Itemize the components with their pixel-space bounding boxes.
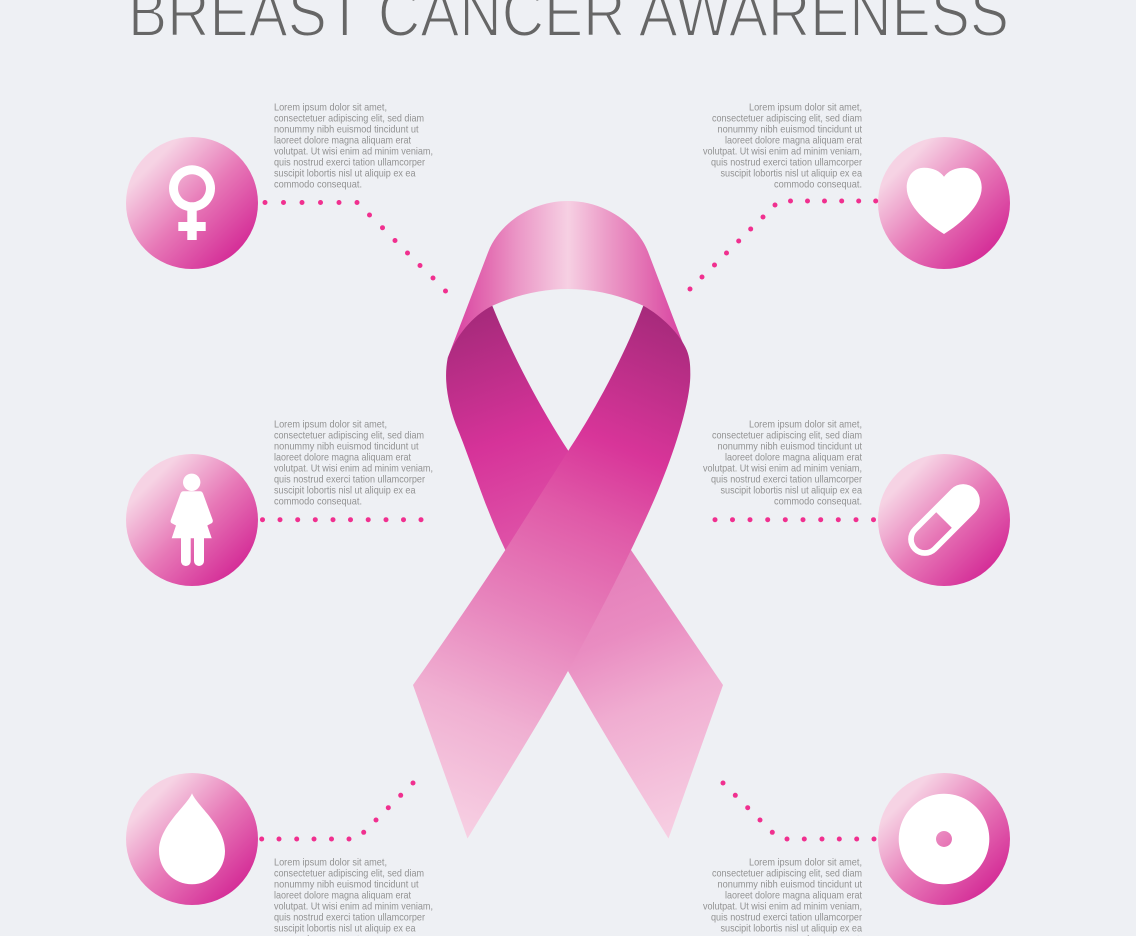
text block: suscipit lobortis nisl ut aliquip ex ea bbox=[720, 485, 862, 496]
text block: quis nostrud exerci tation ullamcorper bbox=[711, 157, 863, 168]
panel: middle right pill bbox=[703, 420, 1010, 586]
text block: commodo consequat. bbox=[774, 496, 862, 507]
text block bbox=[274, 858, 433, 936]
text block: commodo consequat. bbox=[774, 179, 862, 190]
dotted connector bbox=[259, 780, 416, 842]
awareness ribbon bbox=[413, 201, 723, 838]
icon circle bbox=[878, 454, 1010, 586]
text block: suscipit lobortis nisl ut aliquip ex ea bbox=[274, 923, 416, 934]
text block: consectetuer adipiscing elit, sed diam bbox=[274, 869, 424, 880]
text block: consectetuer adipiscing elit, sed diam bbox=[712, 114, 862, 125]
text block: nonummy nibh euismod tincidunt ut bbox=[274, 124, 419, 136]
text block: laoreet dolore magna aliquam erat bbox=[274, 136, 411, 146]
dotted connector bbox=[260, 517, 424, 522]
text block: consectetuer adipiscing elit, sed diam bbox=[712, 431, 862, 442]
icon circle bbox=[878, 773, 1010, 905]
text block: laoreet dolore magna aliquam erat bbox=[725, 452, 862, 464]
icon: heart bbox=[907, 168, 982, 234]
panel: middle left woman bbox=[126, 420, 433, 586]
icon circle bbox=[126, 773, 258, 905]
text block: consectetuer adipiscing elit, sed diam bbox=[274, 431, 424, 442]
text block: nonummy nibh euismod tincidunt ut bbox=[718, 880, 862, 890]
icon circle bbox=[126, 137, 258, 269]
text block: suscipit lobortis nisl ut aliquip ex ea bbox=[274, 485, 416, 496]
dotted connector bbox=[720, 780, 876, 842]
text block: Lorem ipsum dolor sit amet, bbox=[749, 858, 862, 869]
text block: Lorem ipsum dolor sit amet, bbox=[274, 858, 387, 869]
text block: suscipit lobortis nisl ut aliquip ex ea bbox=[720, 168, 862, 179]
dotted connector bbox=[262, 200, 448, 294]
text block bbox=[703, 420, 863, 507]
text block: Lorem ipsum dolor sit amet, bbox=[749, 420, 862, 431]
text block: volutpat. Ut wisi enim ad minim veniam, bbox=[703, 463, 862, 474]
text block: nonummy nibh euismod tincidunt ut bbox=[274, 880, 419, 890]
text block bbox=[703, 858, 863, 936]
panel: bottom left drop bbox=[126, 773, 433, 936]
panel: bottom right target bbox=[703, 773, 1010, 936]
text block bbox=[274, 103, 433, 190]
text block bbox=[703, 103, 863, 190]
text block: Lorem ipsum dolor sit amet, bbox=[274, 103, 387, 114]
text block: nonummy nibh euismod tincidunt ut bbox=[718, 124, 862, 136]
text block bbox=[274, 420, 433, 507]
icon circle bbox=[126, 454, 258, 586]
ribbon back strand, lower tail bbox=[568, 550, 723, 838]
text block: volutpat. Ut wisi enim ad minim veniam, bbox=[274, 463, 433, 474]
text block: suscipit lobortis nisl ut aliquip ex ea bbox=[720, 923, 862, 934]
text block: nonummy nibh euismod tincidunt ut bbox=[274, 442, 419, 452]
icon circle bbox=[878, 137, 1010, 269]
text block: commodo consequat. bbox=[274, 496, 362, 507]
icon: capsule pill bbox=[901, 477, 987, 563]
ribbon back strand, upper bbox=[446, 306, 590, 565]
icon: white disc with centre dot bbox=[899, 794, 989, 884]
ribbon top band bbox=[448, 201, 688, 358]
text block: consectetuer adipiscing elit, sed diam bbox=[712, 869, 862, 880]
panel: top left female symbol bbox=[126, 103, 448, 293]
text block: volutpat. Ut wisi enim ad minim veniam, bbox=[703, 146, 862, 157]
text block: quis nostrud exerci tation ullamcorper bbox=[711, 912, 863, 923]
icon: female symbol bbox=[169, 165, 215, 240]
text block: laoreet dolore magna aliquam erat bbox=[725, 136, 862, 146]
text block: laoreet dolore magna aliquam erat bbox=[274, 890, 411, 902]
text block: consectetuer adipiscing elit, sed diam bbox=[274, 114, 424, 125]
text block: suscipit lobortis nisl ut aliquip ex ea bbox=[274, 168, 416, 179]
text block: volutpat. Ut wisi enim ad minim veniam, bbox=[274, 146, 433, 157]
text block: volutpat. Ut wisi enim ad minim veniam, bbox=[703, 901, 862, 912]
text block: quis nostrud exerci tation ullamcorper bbox=[274, 912, 426, 923]
text block: volutpat. Ut wisi enim ad minim veniam, bbox=[274, 901, 433, 912]
text block: Lorem ipsum dolor sit amet, bbox=[749, 103, 862, 114]
text block: quis nostrud exerci tation ullamcorper bbox=[274, 157, 426, 168]
text block: laoreet dolore magna aliquam erat bbox=[274, 452, 411, 464]
dotted connector bbox=[712, 517, 876, 522]
ribbon front strand bbox=[413, 306, 690, 838]
dotted connector bbox=[688, 198, 878, 292]
text block: Lorem ipsum dolor sit amet, bbox=[274, 420, 387, 431]
text block: quis nostrud exerci tation ullamcorper bbox=[274, 474, 426, 485]
panel: top right heart bbox=[688, 103, 1010, 291]
text block: quis nostrud exerci tation ullamcorper bbox=[711, 474, 863, 485]
text block: commodo consequat. bbox=[274, 179, 362, 190]
text block: laoreet dolore magna aliquam erat bbox=[725, 890, 862, 902]
icon: drop bbox=[159, 793, 225, 884]
icon: woman figure bbox=[171, 474, 213, 566]
text block: nonummy nibh euismod tincidunt ut bbox=[718, 442, 862, 452]
